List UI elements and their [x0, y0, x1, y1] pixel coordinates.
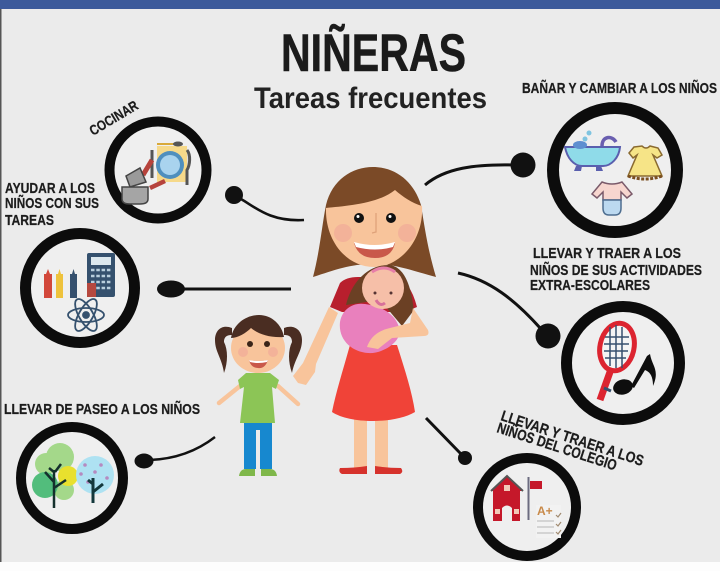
label: cocinar: COCINAR — [86, 97, 141, 139]
icon: homework — [26, 234, 134, 342]
icon: trees — [21, 427, 123, 529]
label: colegio: LLEVAR Y TRAER A LOS — [499, 408, 646, 470]
icon: school — [478, 458, 576, 556]
connector: homework — [157, 280, 291, 298]
title: NIÑERAS — [281, 23, 466, 83]
icon: bath and clothes — [553, 108, 677, 232]
label: colegio: NIÑOS DEL COLEGIO — [495, 419, 619, 475]
label: ayudar tareas: NIÑOS CON SUS — [5, 194, 99, 212]
connector: bath — [425, 152, 536, 185]
label: actividades: LLEVAR Y TRAER A LOS — [533, 245, 681, 262]
icon: school: A+ — [537, 504, 553, 518]
connector: school — [426, 418, 472, 465]
label: ayudar tareas: TAREAS — [5, 212, 54, 229]
label: actividades: EXTRA-ESCOLARES — [530, 277, 650, 294]
connector: cooking — [225, 186, 304, 220]
label: ayudar tareas: AYUDAR A LOS — [5, 180, 95, 197]
icon: racket and music note — [566, 306, 680, 420]
figure: mother with baby — [293, 167, 436, 474]
label: actividades — [530, 245, 702, 294]
connector: outings — [134, 437, 215, 468]
connector: activities — [458, 273, 560, 348]
label: ayudar tareas — [5, 180, 99, 229]
label: paseo: LLEVAR DE PASEO A LOS NIÑOS — [4, 400, 200, 418]
subtitle: Tareas frecuentes — [254, 82, 487, 115]
icon: cooking — [110, 122, 206, 218]
figure: girl — [215, 315, 302, 476]
top bar — [0, 0, 720, 9]
